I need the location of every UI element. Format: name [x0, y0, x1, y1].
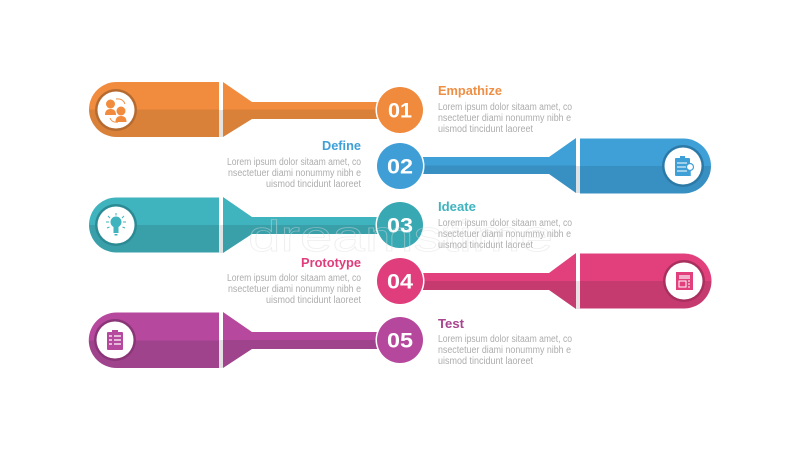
text block 5: uismod tincidunt laoreet: [438, 356, 533, 367]
heading: Empathize: Empathize: [438, 83, 502, 98]
arrow 3: [223, 197, 378, 253]
arrow 2: [422, 138, 576, 193]
text block 4: uismod tincidunt laoreet: [266, 295, 361, 306]
icon: blueprint: [663, 260, 705, 302]
text block 2: Lorem ipsum dolor sitaam amet, co: [227, 157, 361, 168]
row 3: Ideate: [89, 197, 572, 253]
heading: Ideate: Ideate: [438, 199, 476, 214]
icon: clipboard with magnifier: [662, 145, 704, 187]
arrow 1: [223, 82, 378, 137]
separator 3: [219, 197, 223, 253]
capsule 3: [89, 198, 219, 252]
separator 5: [219, 312, 223, 368]
capsule 4: [580, 254, 712, 308]
arrow 4: [422, 253, 576, 309]
text block 3: [438, 218, 572, 251]
row 5: Test: [89, 312, 572, 368]
number circle 02: 02: [387, 156, 413, 178]
row 1: Empathize: [89, 82, 572, 137]
separator 2: [576, 138, 580, 193]
watermark: dreamstime: [248, 212, 553, 261]
text block 2: uismod tincidunt laoreet: [266, 179, 361, 190]
text block 5: Lorem ipsum dolor sitaam amet, co: [438, 334, 572, 345]
text block 3: nsectetuer diami nonummy nibh e: [438, 229, 571, 240]
capsule 5: [89, 312, 219, 368]
capsule 2: [580, 138, 711, 194]
separator 1: [219, 82, 223, 137]
number circle 05: [376, 316, 424, 364]
heading: Prototype: Prototype: [301, 255, 361, 270]
number circle 01: 01: [388, 100, 412, 122]
capsule 1: [89, 82, 219, 137]
text block 5: [438, 334, 572, 367]
row 4: Prototype: [227, 253, 712, 309]
number circle 04: [376, 256, 424, 306]
number circle 03: 03: [387, 214, 413, 238]
number circle 04: 04: [387, 270, 413, 294]
text block 4: [227, 273, 361, 306]
number circle 01: [376, 86, 424, 134]
icon: checklist clipboard: [94, 319, 136, 361]
number circle 03: [376, 200, 424, 250]
text block 1: Lorem ipsum dolor sitaam amet, co: [438, 102, 572, 113]
number circle 02: [376, 142, 424, 190]
text block 5: nsectetuer diami nonummy nibh e: [438, 345, 571, 356]
heading: Define: Define: [322, 138, 361, 153]
icon: two heads exchange: [95, 89, 137, 131]
row 2: Define: [227, 138, 711, 194]
text block 4: nsectetuer diami nonummy nibh e: [228, 284, 361, 295]
text block 3: Lorem ipsum dolor sitaam amet, co: [438, 218, 572, 229]
text block 2: [227, 157, 361, 190]
icon: light bulb: [95, 204, 137, 246]
text block 1: [438, 102, 572, 135]
arrow 5: [223, 312, 378, 368]
text block 4: Lorem ipsum dolor sitaam amet, co: [227, 273, 361, 284]
text block 1: nsectetuer diami nonummy nibh e: [438, 113, 571, 124]
heading: Test: Test: [438, 316, 465, 331]
separator 4: [576, 253, 580, 309]
text block 2: nsectetuer diami nonummy nibh e: [228, 168, 361, 179]
text block 1: uismod tincidunt laoreet: [438, 124, 533, 135]
number circle 05: 05: [387, 330, 413, 352]
text block 3: uismod tincidunt laoreet: [438, 240, 533, 251]
